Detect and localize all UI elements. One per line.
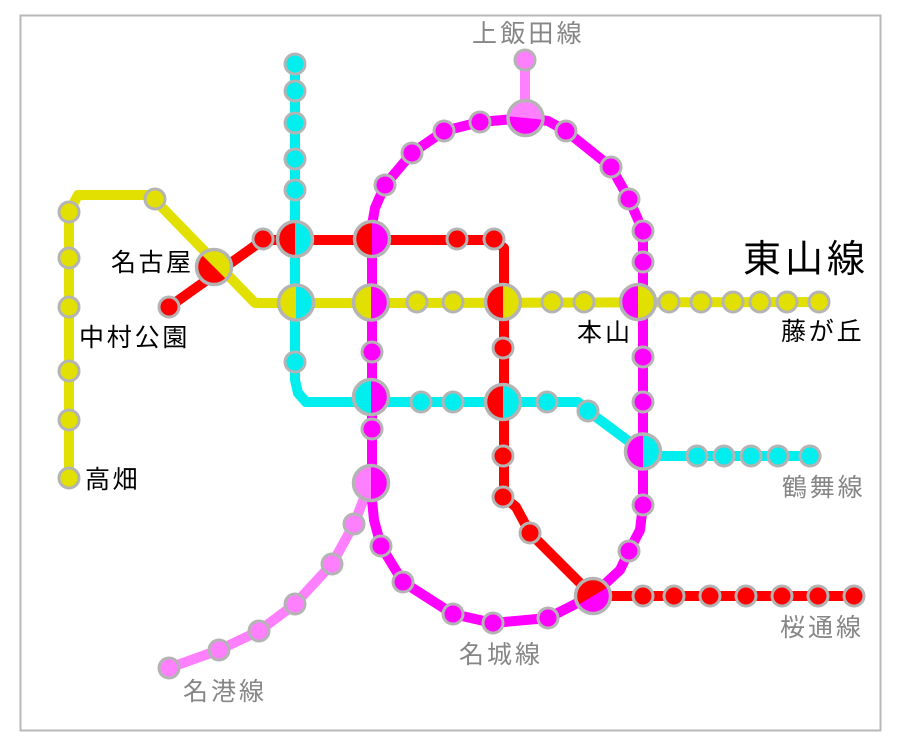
stations: Tsurumai — [285, 54, 820, 466]
title: Higashiyama line: 東山線 — [743, 239, 869, 281]
label: Meijo line: 名城線 — [459, 641, 543, 669]
stations: Meijo — [362, 112, 653, 633]
interchange: red and yellow — [486, 284, 520, 320]
line: Higashiyama (yellow) — [69, 195, 819, 478]
interchange: Sakura-dori and Meijo — [576, 578, 610, 614]
interchange: red and cyan south — [486, 384, 520, 420]
label: Nagoya: 名古屋 — [111, 249, 194, 277]
label: Fujigaoka: 藤が丘 — [781, 318, 864, 346]
label: Nakamura Koen: 中村公園 — [79, 324, 190, 352]
interchange: Kamiiida junction — [508, 100, 543, 136]
interchange: yellow and cyan — [278, 285, 314, 320]
line: Sakura-dori (red) — [169, 240, 854, 596]
interchange: magenta and cyan east — [626, 434, 660, 469]
label: Motoyama: 本山 — [577, 319, 633, 347]
label: Takabata: 高畑 — [85, 466, 140, 494]
interchange: Nagoya — [196, 250, 232, 285]
line: Meijo (magenta) — [372, 118, 643, 623]
stations: Meiko and Kamiiida — [159, 50, 535, 678]
interchange: cyan and magenta — [354, 380, 388, 414]
interchange: Meiko junction — [354, 466, 388, 500]
label: Sakura-dori line: 桜通線 — [780, 614, 864, 642]
label: Meiko line: 名港線 — [183, 678, 267, 706]
interchange: red and magenta — [354, 222, 390, 256]
line: Tsurumai (cyan) — [295, 64, 810, 456]
interchange: Motoyama — [620, 284, 656, 320]
stations: Sakura-dori — [159, 229, 864, 606]
label: Kamiiida line: 上飯田線 — [472, 20, 585, 48]
stations: Higashiyama west branch — [59, 189, 829, 488]
interchange: red and cyan — [278, 222, 312, 256]
label: Tsurumai line: 鶴舞線 — [782, 474, 865, 502]
line: Meiko (pink) — [169, 60, 525, 668]
interchange: yellow and magenta — [354, 285, 388, 320]
